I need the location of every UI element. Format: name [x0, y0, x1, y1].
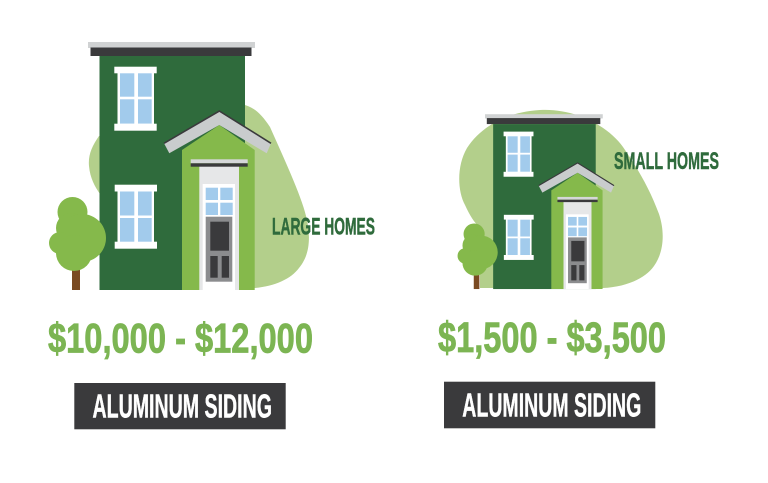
lower window — [115, 185, 157, 249]
porch — [182, 125, 255, 290]
label: large homes: LARGE HOMES — [272, 213, 375, 240]
panel: large homes — [48, 42, 375, 429]
flat roof — [88, 42, 255, 56]
panel: small homes — [438, 110, 719, 428]
porch gable roof — [539, 163, 614, 193]
door surround — [564, 202, 591, 289]
price: large homes: $10,000 - $12,000 — [48, 314, 313, 362]
porch gable roof — [164, 111, 271, 153]
house: large — [88, 42, 271, 290]
upper window — [504, 132, 533, 177]
door canopy — [557, 197, 598, 202]
badge: aluminum siding left: ALUMINUM SIDING — [92, 388, 272, 425]
background blob: small home — [459, 110, 663, 288]
door — [566, 214, 589, 289]
porch — [551, 173, 603, 289]
badge: aluminum siding right — [444, 382, 655, 428]
door — [203, 184, 235, 290]
tree: small home — [458, 223, 498, 289]
door canopy — [191, 159, 248, 167]
background blob: large home — [89, 105, 309, 289]
badge: aluminum siding right: ALUMINUM SIDING — [462, 387, 641, 424]
house wall — [493, 124, 596, 289]
tree: large home — [49, 197, 106, 290]
house wall — [100, 56, 245, 290]
flat roof — [485, 114, 603, 124]
house: small — [485, 114, 614, 289]
upper window — [114, 67, 157, 131]
price: small homes: $1,500 - $3,500 — [438, 315, 666, 362]
door surround — [199, 166, 239, 290]
badge: aluminum siding left — [74, 383, 286, 429]
lower window — [504, 215, 534, 260]
